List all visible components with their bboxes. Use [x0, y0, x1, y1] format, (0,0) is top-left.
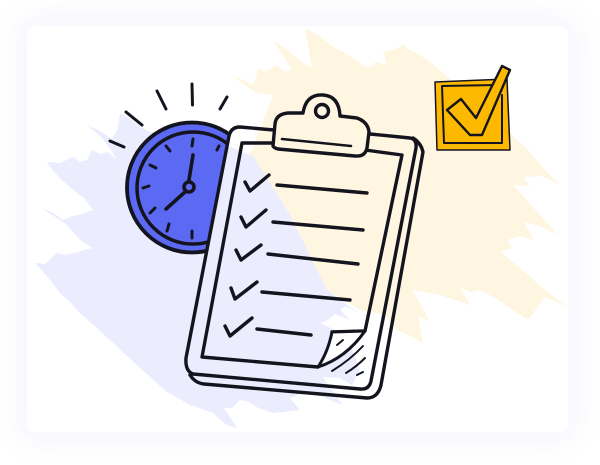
checklist items: [225, 175, 367, 336]
clip hole: [316, 104, 328, 118]
clock inner ring: [135, 130, 226, 246]
check mark: [447, 66, 510, 135]
blue brush stroke background: [35, 113, 360, 428]
page corner fold: [318, 331, 365, 367]
icon: clock: [125, 120, 229, 254]
clock face: [125, 120, 229, 254]
icon: yellow checkbox: [435, 66, 510, 150]
clock hands: [166, 155, 193, 209]
clip body: [273, 95, 369, 156]
clipboard clip: [273, 95, 369, 156]
clock rays: [110, 84, 227, 147]
board thickness edge: [190, 138, 423, 398]
item 5: [225, 318, 311, 336]
panel: white card: [27, 26, 568, 432]
clipboard board: [186, 127, 423, 398]
item 1: [245, 175, 367, 193]
checkbox inner border: [442, 85, 502, 143]
clock centre: [184, 182, 194, 192]
item 4: [231, 282, 350, 300]
item 3: [236, 245, 358, 264]
clock tick marks: [143, 139, 219, 238]
illustration: clipboard checklist scene: [35, 28, 566, 428]
board outline: [186, 127, 416, 389]
clip bar: [282, 139, 351, 146]
fold shading lines: [332, 340, 365, 375]
checkbox square: [435, 79, 510, 150]
item 2: [241, 210, 363, 230]
yellow brush stroke background: [227, 28, 567, 343]
sheet outline: [202, 143, 402, 367]
